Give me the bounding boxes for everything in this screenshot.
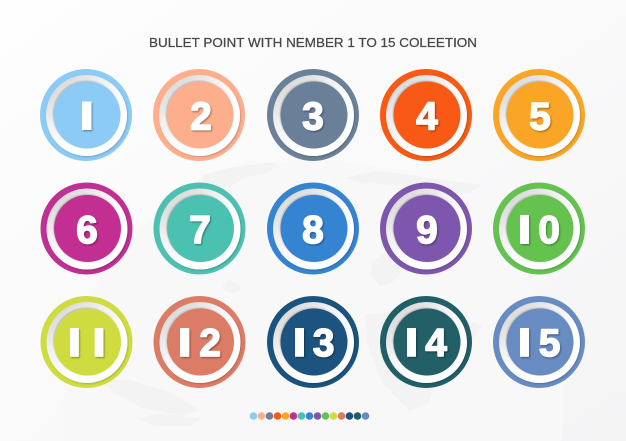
bullet 3: 3 [302, 96, 324, 138]
bullet 10 [493, 182, 585, 274]
bullet 2: 2 [190, 96, 212, 138]
bullet 13 [267, 296, 359, 388]
bullet 11: 1 [65, 322, 87, 365]
bullet 11 [40, 296, 132, 388]
bullet 5 [493, 69, 585, 161]
bullet 13: 3 [313, 322, 334, 365]
bullet 8: 8 [302, 209, 324, 252]
bullet 7 [154, 182, 246, 274]
bullet 9: 9 [416, 209, 438, 252]
bullet 7: 7 [189, 209, 211, 252]
bullet 1: 1 [77, 96, 99, 138]
bullet 11: 1 [90, 322, 111, 365]
bullet 15 [493, 296, 585, 388]
bullet 8 [267, 182, 359, 274]
bullet 4 [380, 69, 472, 161]
bullet 12 [154, 296, 246, 388]
bullet 14 [380, 296, 472, 388]
bullet 1 [40, 69, 132, 161]
bullet 14: 1 [402, 322, 424, 365]
title: BULLET POINT WITH NEMBER 1 TO 15 COLEETION [149, 36, 477, 50]
bullet 6: 6 [76, 209, 98, 252]
bullet 13: 1 [290, 322, 312, 365]
bullet 10: 0 [538, 209, 560, 252]
bullet 3 [267, 69, 359, 161]
bullet 9 [380, 182, 472, 274]
bullet 2 [153, 69, 245, 161]
bullet 15: 1 [515, 322, 537, 365]
bullet 12: 2 [199, 322, 221, 365]
world map watermark [63, 159, 563, 441]
bullet 10: 1 [515, 209, 537, 252]
colour swatch dots [250, 412, 369, 420]
bullet 15: 5 [539, 322, 560, 365]
bullet 6 [40, 182, 132, 274]
bullet 5: 5 [529, 96, 551, 138]
bullet 4: 4 [416, 96, 438, 138]
bullet 12: 1 [175, 322, 197, 365]
bullet 14: 4 [425, 322, 447, 365]
